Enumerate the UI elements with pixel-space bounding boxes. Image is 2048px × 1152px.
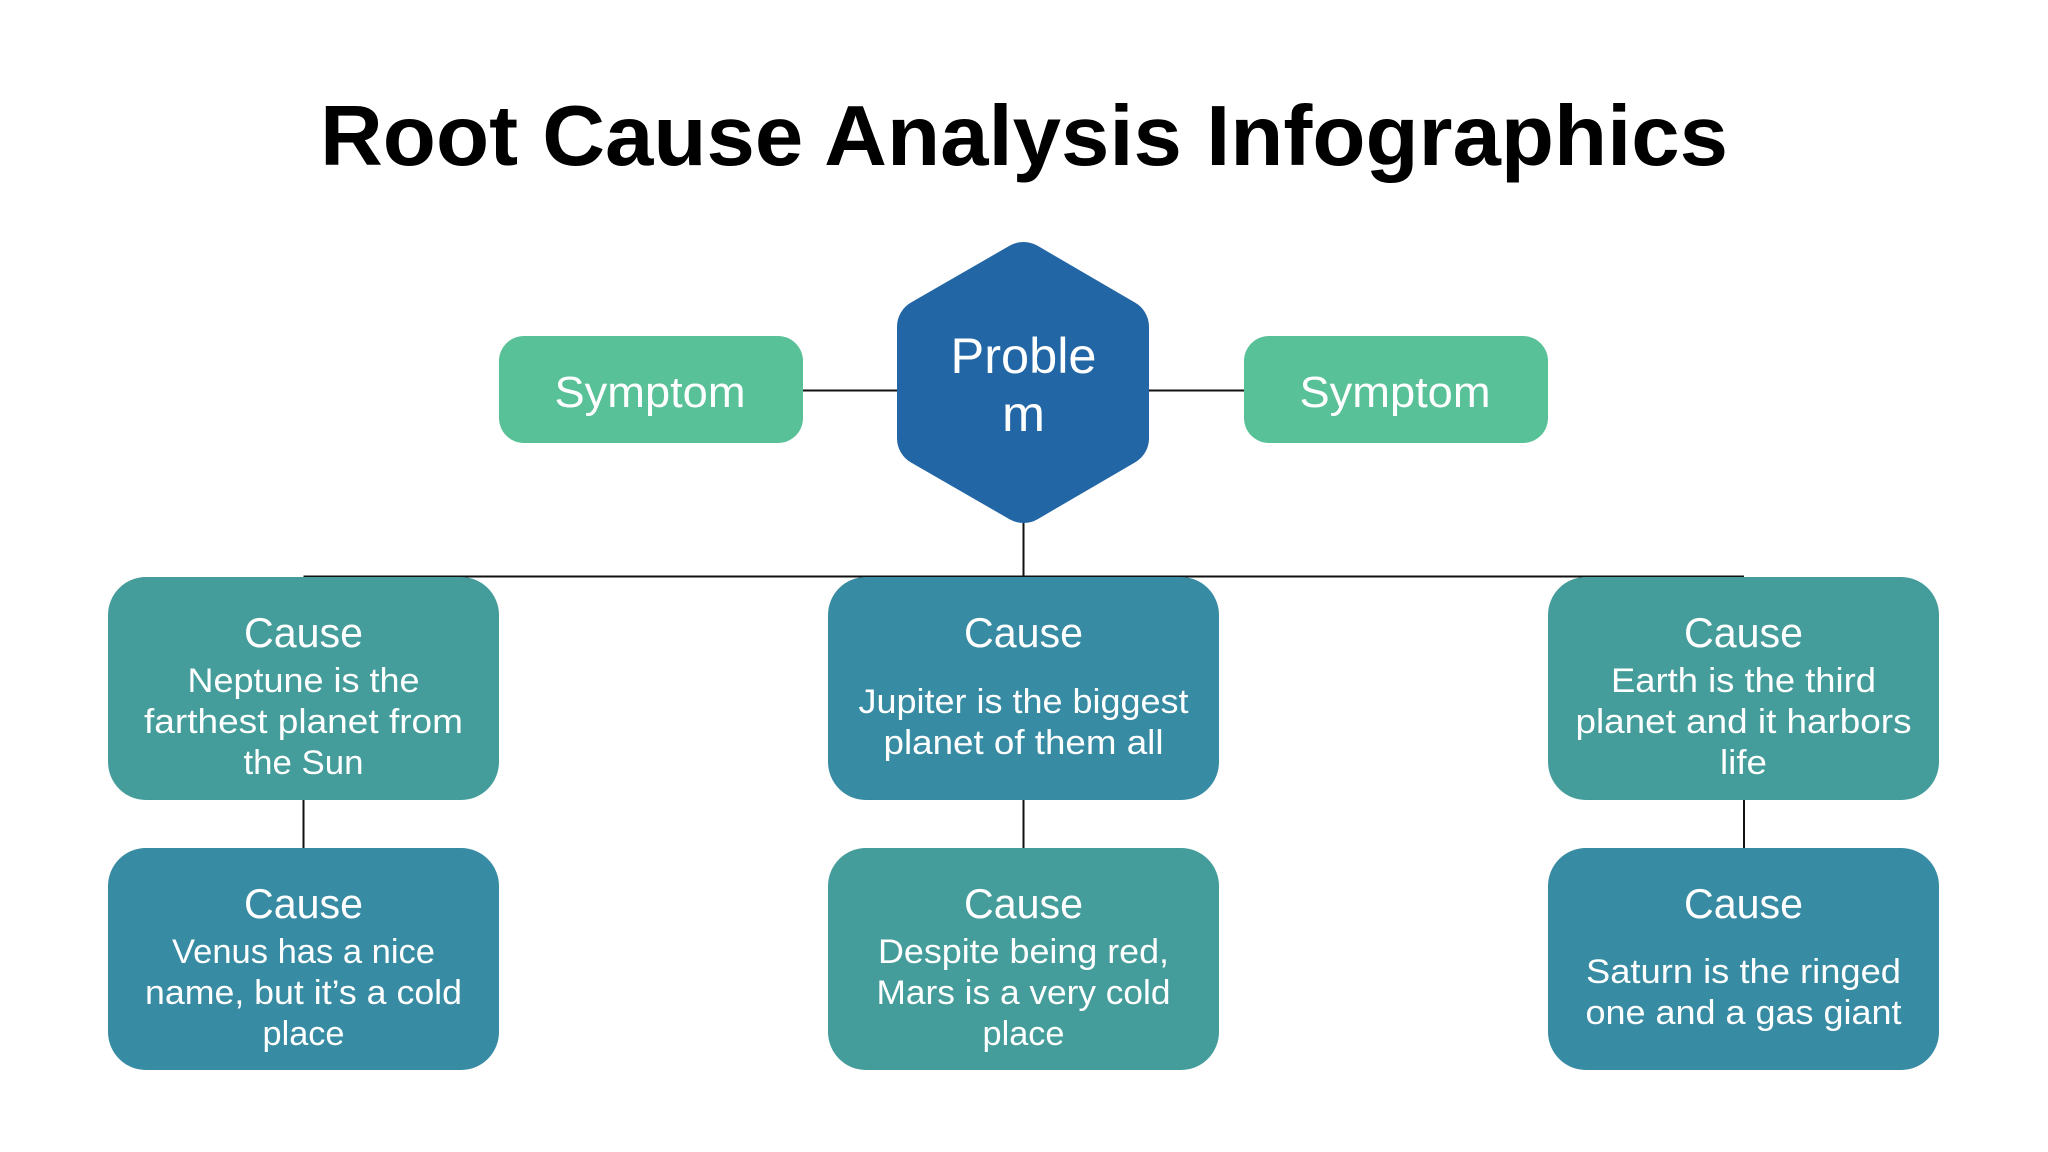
cause box: Neptune: Cause [244, 609, 363, 656]
cause box: Neptune: farthest planet from [144, 703, 463, 741]
cause box: Earth: life [1720, 744, 1767, 782]
problem hexagon [925, 270, 1121, 495]
cause box: Venus: Cause [244, 880, 363, 927]
cause box: Venus: name, but it’s a cold [145, 974, 462, 1012]
cause box: Jupiter: Cause [964, 609, 1083, 656]
cause box: Mars: Mars is a very cold [876, 974, 1170, 1012]
symptom box: left [499, 336, 803, 443]
problem hexagon: m [1002, 386, 1045, 442]
cause box: Neptune: Neptune is the [188, 662, 420, 700]
cause box: Mars: Cause [964, 880, 1083, 927]
symptom box: left: Symptom [554, 368, 746, 417]
cause box: Saturn: Saturn is the ringed [1586, 953, 1901, 991]
cause box: Earth: planet and it harbors [1576, 703, 1912, 741]
cause box: Mars: Despite being red, [878, 933, 1169, 971]
cause box: Venus [108, 848, 499, 1070]
symptom box: right [1244, 336, 1548, 443]
cause box: Jupiter: Jupiter is the biggest [858, 683, 1189, 721]
cause box: Neptune: the Sun [244, 744, 364, 782]
cause box: Venus: place [262, 1015, 344, 1053]
cause box: Mars: place [982, 1015, 1064, 1053]
symptom box: right: Symptom [1300, 368, 1490, 417]
cause box: Jupiter: planet of them all [884, 724, 1164, 762]
cause box: Saturn [1548, 848, 1939, 1070]
title: Root Cause Analysis Infographics [320, 89, 1728, 184]
cause box: Neptune [108, 577, 499, 800]
problem hexagon: Proble [950, 328, 1096, 384]
cause box: Earth: Earth is the third [1611, 662, 1876, 700]
cause box: Saturn: one and a gas giant [1586, 994, 1902, 1032]
cause box: Venus: Venus has a nice [172, 933, 435, 971]
cause box: Earth [1548, 577, 1939, 800]
cause box: Jupiter [828, 577, 1219, 800]
cause box: Earth: Cause [1684, 609, 1803, 656]
cause box: Mars [828, 848, 1219, 1070]
cause box: Saturn: Cause [1684, 880, 1803, 927]
